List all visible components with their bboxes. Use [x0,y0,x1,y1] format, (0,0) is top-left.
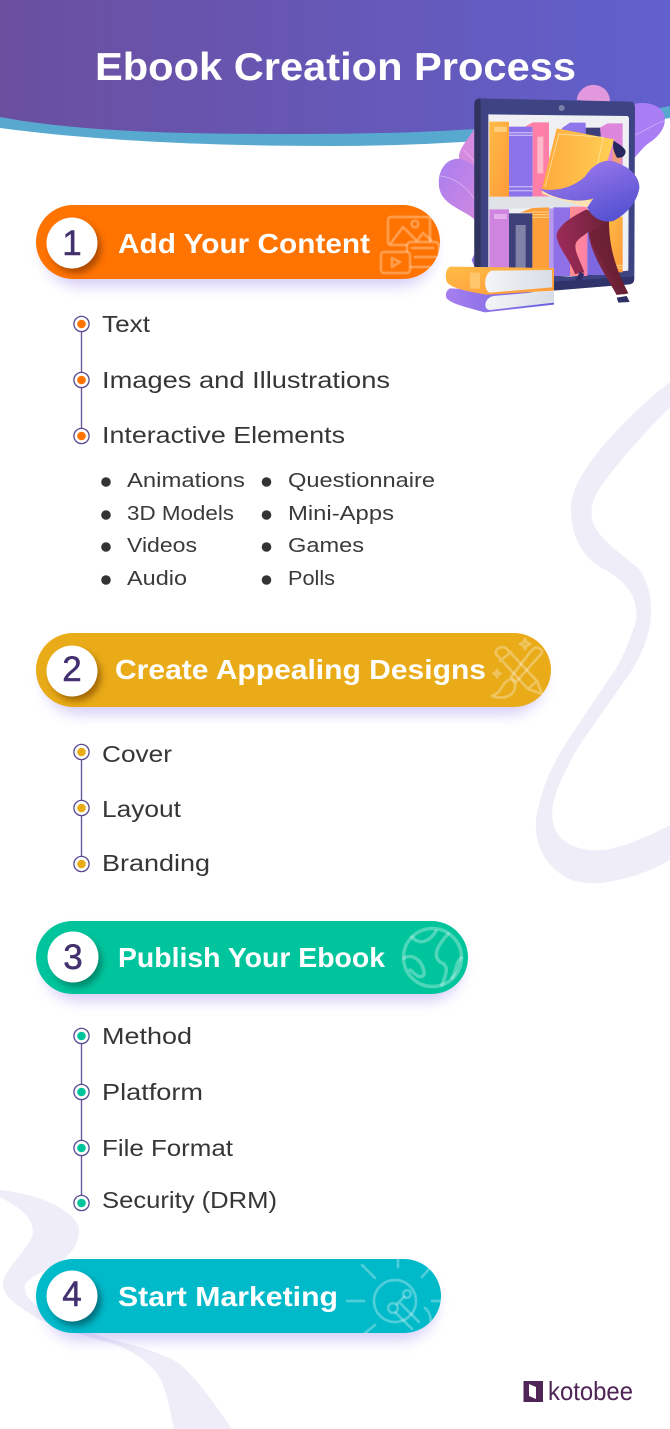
interactive elements sub-list: Audio [127,567,187,590]
shelf books [488,122,629,276]
marker: text [74,316,89,332]
section 2 header pill: Create Appealing Designs [115,654,486,685]
section 3 list: Platform [102,1079,203,1105]
section 1 list [74,311,390,448]
section 3 list: Method [102,1023,192,1049]
stacked books [446,267,554,312]
illustration: person shelving books on a tablet [439,85,665,312]
interactive elements sub-list: Mini-Apps [288,502,394,525]
title: Ebook Creation Process [95,46,576,89]
kotobee logo: kotobee [548,1376,633,1406]
section 1 header pill: 1 [62,224,82,263]
section 1 list: Text [102,311,151,337]
interactive elements sub-list: 3D Models [127,502,234,525]
person [539,141,639,303]
icon: light bulb with share symbol [347,1259,441,1333]
icon: media [381,217,439,273]
big yellow book [542,128,614,207]
section 3 list: File Format [102,1135,234,1161]
interactive elements sub-list: Videos [127,534,197,557]
tablet [474,98,635,291]
section 4 header pill [36,1259,441,1340]
interactive elements sub-list: Games [288,534,364,557]
header banner [0,0,670,146]
section 1 header pill: Add Your Content [118,228,370,259]
leaves [439,85,665,267]
section 3 list: Security (DRM) [102,1187,277,1213]
interactive elements sub-list: Questionnaire [288,469,435,492]
section 3 header pill: Publish Your Ebook [118,942,385,973]
icon: pencil and brush [492,639,542,697]
section 2 list: Layout [102,796,182,822]
section 1 header pill [36,205,440,286]
section 3 list [74,1023,277,1213]
section 4 header pill: 4 [62,1275,82,1314]
section 2 list: Cover [102,741,172,767]
interactive elements sub-list [101,469,435,590]
section 3 header pill: 3 [63,938,83,977]
section 2 header pill: 2 [62,650,82,689]
icon: globe [404,928,462,986]
section 3 header pill [36,921,468,1001]
section 1 list: Interactive Elements [102,422,345,448]
section 2 header pill [36,633,551,714]
interactive elements sub-list: Polls [288,567,335,590]
section 2 list: Branding [102,850,210,876]
background swoosh left [0,1190,232,1429]
interactive elements sub-list: Animations [127,469,245,492]
background swoosh right [536,382,670,883]
section 4 header pill: Start Marketing [118,1281,338,1312]
section 2 list [74,741,210,876]
section 1 list: Images and Illustrations [102,367,390,393]
